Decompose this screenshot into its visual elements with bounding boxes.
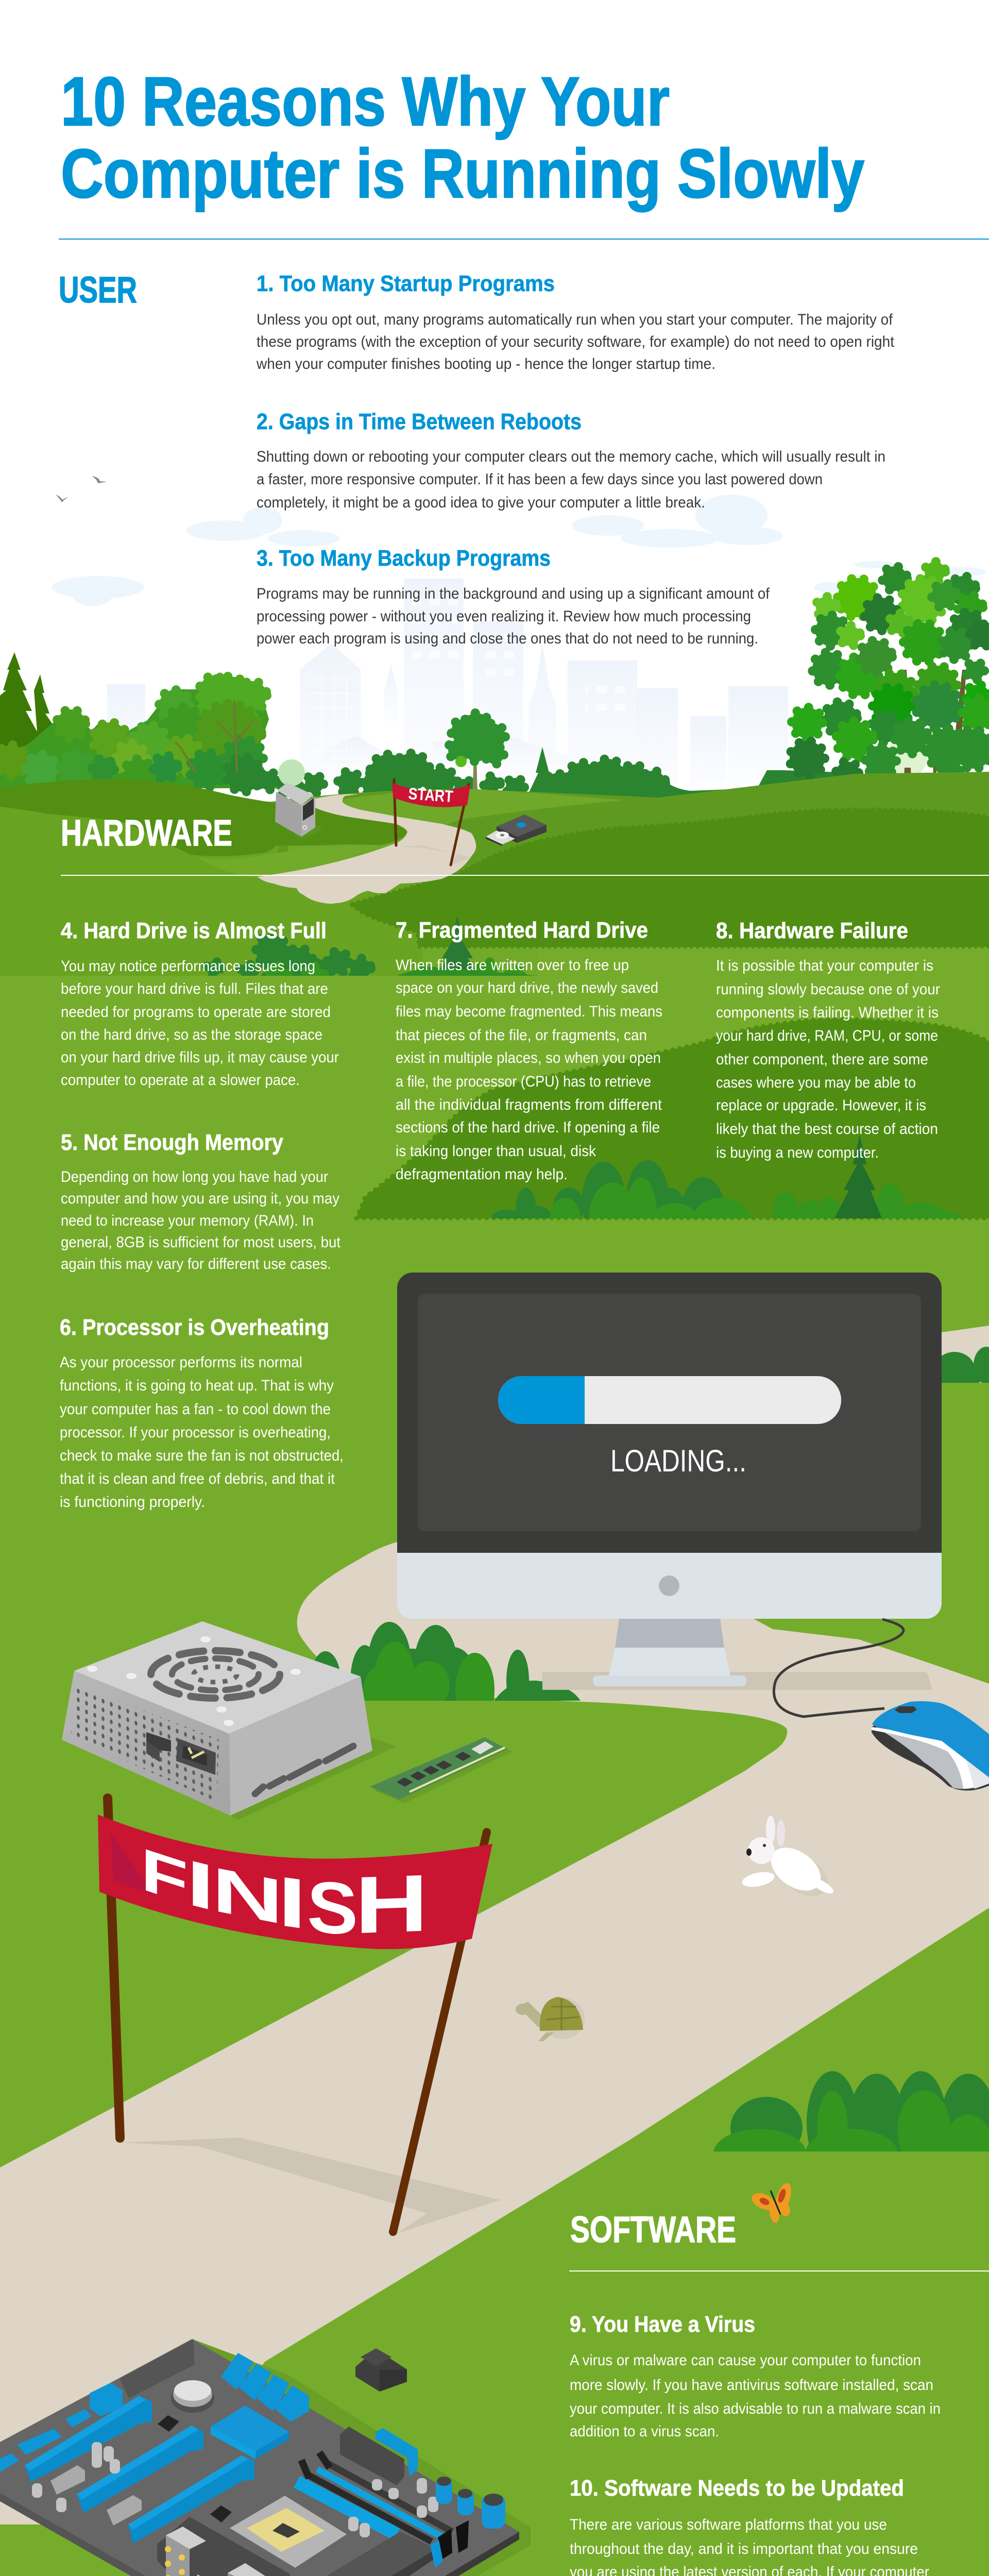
ram clips bbox=[438, 2520, 469, 2560]
mouse with cable bbox=[774, 1619, 989, 1791]
reason 3 bbox=[257, 546, 770, 647]
monitor bezel bbox=[397, 1273, 942, 1553]
reason 7: that pieces of the file, or fragments, can bbox=[396, 1027, 647, 1044]
reason 7 bbox=[396, 918, 662, 1183]
psu screws bbox=[87, 1636, 301, 1726]
mouse cable bbox=[774, 1619, 903, 1717]
hardware rule bbox=[61, 875, 989, 876]
blue block chipset bbox=[211, 2405, 289, 2459]
dark block bbox=[340, 2427, 404, 2485]
reason 2: 2. Gaps in Time Between Reboots bbox=[257, 409, 582, 434]
small conifer near start bbox=[528, 747, 557, 793]
psu fan grille bbox=[151, 1651, 280, 1698]
reason 8: components is failing. Whether it is bbox=[716, 1004, 939, 1021]
reason 6: that it is clean and free of debris, and that it bbox=[60, 1470, 335, 1487]
reason 9: your computer. It is also advisable to run a malware scan in bbox=[570, 2400, 941, 2417]
reason 10: 10. Software Needs to be Updated bbox=[570, 2476, 904, 2501]
reason 6: functions, it is going to heat up. That is why bbox=[60, 1377, 334, 1394]
rabbit bbox=[741, 1816, 835, 1905]
reason 6: processor. If your processor is overheating, bbox=[60, 1424, 331, 1441]
title bbox=[61, 63, 864, 212]
reason 4: 4. Hard Drive is Almost Full bbox=[61, 918, 327, 943]
reason 9: A virus or malware can cause your computer to function bbox=[570, 2352, 921, 2369]
tortoise bbox=[516, 1997, 585, 2041]
reason 2 bbox=[257, 409, 885, 511]
reason 3: power each program is using and close the ones that do not need to be running. bbox=[257, 630, 758, 647]
trunks bbox=[841, 670, 966, 813]
reason 7: space on your hard drive, the newly saved bbox=[396, 979, 658, 996]
conifer bbox=[441, 916, 476, 971]
reason 6: As your processor performs its normal bbox=[60, 1354, 302, 1371]
mid bushes along hardware band bbox=[202, 916, 538, 976]
user section heading: USER bbox=[59, 270, 137, 311]
reason 5: need to increase your memory (RAM). In bbox=[61, 1212, 314, 1229]
reason 6: is functioning properly. bbox=[60, 1494, 205, 1511]
reason 6 bbox=[60, 1315, 344, 1511]
birds bbox=[56, 476, 107, 502]
finish banner bbox=[98, 1798, 492, 2232]
reason 9: addition to a virus scan. bbox=[570, 2423, 719, 2440]
monitor foot shadow bbox=[542, 1672, 932, 1690]
RAM stick bbox=[370, 1737, 513, 1803]
finish letters: H bbox=[355, 1858, 428, 1951]
road section behind monitor bbox=[942, 1326, 989, 1383]
blue capacitors bbox=[436, 2477, 505, 2529]
main heatsink bbox=[300, 2532, 434, 2576]
reason 8: likely that the best course of action bbox=[716, 1121, 938, 1138]
road to the finish bbox=[0, 1542, 989, 2524]
monitor stand bbox=[615, 1619, 724, 1648]
banner poles bbox=[394, 779, 469, 865]
monitor chin bbox=[397, 1553, 942, 1619]
reason 7: files may become fragmented. This means bbox=[396, 1003, 662, 1020]
io blocks bbox=[228, 2563, 309, 2576]
heatsink fins bbox=[221, 2353, 309, 2422]
reason 6: 6. Processor is Overheating bbox=[60, 1315, 329, 1340]
reason 7: defragmentation may help. bbox=[396, 1166, 568, 1183]
tree near start bbox=[448, 713, 505, 795]
reason 4: on your hard drive fills up, it may cause your bbox=[61, 1049, 339, 1066]
reason 4: on the hard drive, so as the storage space bbox=[61, 1026, 322, 1043]
expansion slots bbox=[25, 2396, 254, 2544]
reason 5: again this may vary for different use cases. bbox=[61, 1256, 331, 1273]
clouds bbox=[52, 495, 986, 606]
finish poles bbox=[108, 1798, 120, 2138]
reason 8: is buying a new computer. bbox=[716, 1144, 879, 1161]
mouse body bbox=[872, 1705, 989, 1791]
conifers bbox=[0, 652, 58, 788]
reason 6: check to make sure the fan is not obstructed, bbox=[60, 1447, 344, 1464]
left mid green ground bbox=[0, 802, 538, 976]
start hill bbox=[258, 772, 989, 886]
reason 8: It is possible that your computer is bbox=[716, 957, 933, 974]
reason 1: when your computer finishes booting up - hence the longer startup time. bbox=[256, 355, 715, 372]
reason 1 bbox=[256, 271, 895, 372]
bush by monitor bbox=[311, 1622, 581, 1701]
computer tower bbox=[275, 783, 325, 839]
hill right of road bbox=[773, 1383, 989, 1684]
psu switch bbox=[146, 1732, 171, 1752]
reason 1: 1. Too Many Startup Programs bbox=[257, 271, 555, 296]
reason 8: replace or upgrade. However, it is bbox=[716, 1097, 926, 1114]
top capacitor bbox=[171, 2380, 214, 2413]
reason 7: When files are written over to free up bbox=[396, 957, 629, 974]
reason 7: is taking longer than usual, disk bbox=[396, 1143, 596, 1160]
psu top face bbox=[74, 1621, 361, 1734]
reason 5: general, 8GB is sufficient for most users, but bbox=[61, 1234, 341, 1251]
hardware section heading: HARDWARE bbox=[61, 813, 232, 854]
finish line shadow on road bbox=[120, 2138, 500, 2233]
finish letters: I bbox=[278, 1861, 306, 1944]
finish letters: S bbox=[307, 1866, 358, 1951]
finish letters: N bbox=[212, 1854, 283, 1938]
cpu socket bbox=[230, 2496, 347, 2568]
motherboard bbox=[0, 2339, 531, 2576]
mouse top bbox=[872, 1701, 989, 1777]
reason 8 bbox=[716, 918, 940, 1161]
finish letters: F bbox=[141, 1835, 188, 1917]
bushes on lower dark hill bbox=[492, 1136, 962, 1218]
blue bar bbox=[376, 2428, 418, 2477]
reason 7: exist in multiple places, so when you open bbox=[396, 1049, 661, 1066]
reason 7: 7. Fragmented Hard Drive bbox=[396, 918, 648, 943]
software section heading: SOFTWARE bbox=[570, 2210, 736, 2250]
title: 10 Reasons Why Your bbox=[61, 63, 670, 140]
far hedge line bbox=[277, 753, 855, 804]
psu shadow bbox=[230, 1738, 396, 1820]
start banner shadow bbox=[397, 845, 471, 865]
banner label: START bbox=[408, 784, 454, 806]
reason 7: a file, the processor (CPU) has to retrieve bbox=[396, 1073, 651, 1090]
bushes lower right bbox=[714, 2071, 989, 2151]
reason 7: all the individual fragments from different bbox=[396, 1096, 662, 1113]
reason 5: Depending on how long you have had your bbox=[61, 1168, 328, 1185]
psu left face bbox=[62, 1671, 230, 1816]
reason 10: throughout the day, and it is important that you ensure bbox=[570, 2540, 918, 2557]
reason 8: running slowly because one of your bbox=[716, 981, 940, 998]
power connector bbox=[355, 2348, 407, 2392]
reason 8: cases where you may be able to bbox=[716, 1074, 916, 1091]
io shield backing bbox=[157, 2517, 290, 2576]
left dark knoll bbox=[0, 779, 407, 856]
reason 10: There are various software platforms that you use bbox=[570, 2516, 887, 2533]
optical drive bbox=[486, 815, 547, 846]
reason 2: completely, it might be a good idea to give your computer a little break. bbox=[257, 494, 705, 511]
reason 9: 9. You Have a Virus bbox=[570, 2312, 755, 2337]
reason 3: 3. Too Many Backup Programs bbox=[257, 546, 551, 571]
reason 5: computer and how you are using it, you may bbox=[61, 1190, 339, 1207]
reason 4: computer to operate at a slower pace. bbox=[61, 1072, 300, 1089]
skyline windows bbox=[310, 592, 635, 761]
city skyline bbox=[107, 579, 788, 788]
conifer bbox=[834, 1135, 882, 1218]
reason 10 bbox=[570, 2476, 929, 2576]
lower dark hill bbox=[356, 1019, 989, 1218]
start banner bbox=[392, 779, 470, 865]
reason 7: sections of the hard drive. If opening a file bbox=[396, 1119, 660, 1136]
reason 1: these programs (with the exception of your security software, for example) do not need to open right bbox=[257, 333, 895, 350]
winding path at the start bbox=[258, 794, 476, 904]
left tree cluster bbox=[0, 652, 305, 792]
psu right face bbox=[229, 1676, 372, 1816]
psu vents bbox=[255, 1746, 353, 1794]
reason 4: before your hard drive is full. Files that are bbox=[61, 980, 328, 997]
reason 9 bbox=[570, 2312, 941, 2440]
blue connector and pin headers bbox=[0, 2383, 123, 2472]
loading text: LOADING... bbox=[610, 1444, 746, 1478]
audio ports bbox=[165, 2527, 206, 2576]
monitor bbox=[397, 1273, 942, 1690]
reason 8: other component, there are some bbox=[716, 1051, 928, 1068]
reason 6: your computer has a fan - to cool down the bbox=[60, 1401, 331, 1418]
finish letters: I bbox=[186, 1845, 215, 1925]
monitor screen bbox=[418, 1294, 921, 1531]
silver capacitors bbox=[32, 2442, 438, 2537]
reason 4: needed for programs to operate are stored bbox=[61, 1004, 331, 1021]
hills behind the hardware section bbox=[0, 772, 989, 2576]
reason 1: Unless you opt out, many programs automatically run when you start your computer. The majority of bbox=[257, 311, 893, 328]
title rule bbox=[59, 239, 989, 240]
reason 9: more slowly. If you have antivirus software installed, scan bbox=[570, 2377, 933, 2394]
memory slots bbox=[297, 2452, 452, 2541]
butterfly bbox=[749, 2181, 794, 2224]
board top bbox=[0, 2339, 519, 2576]
title: Computer is Running Slowly bbox=[61, 135, 864, 212]
reason 2: a faster, more responsive computer. If it has been a few days since you last powered down bbox=[257, 471, 823, 488]
reason 4: You may notice performance issues long bbox=[61, 958, 315, 975]
board sides bbox=[0, 2493, 299, 2576]
right dark hill bbox=[349, 809, 989, 947]
finish letters bbox=[141, 1835, 428, 1951]
reason 3: Programs may be running in the background and using up a significant amount of bbox=[257, 585, 770, 602]
reason 5: 5. Not Enough Memory bbox=[61, 1130, 283, 1155]
main green ground bbox=[0, 947, 989, 2576]
rear connectors bbox=[120, 2339, 195, 2398]
reason 5 bbox=[61, 1130, 341, 1273]
black chips bbox=[158, 2415, 232, 2522]
canopy mass bbox=[0, 675, 278, 788]
loading bar bbox=[498, 1376, 841, 1424]
reason 3: processing power - without you even realizing it. Review how much processing bbox=[257, 608, 751, 625]
software rule bbox=[569, 2270, 989, 2272]
reason 2: Shutting down or rebooting your computer clears out the memory cache, which will usually result in bbox=[257, 448, 885, 465]
power supply unit bbox=[62, 1621, 396, 1820]
reason 8: 8. Hardware Failure bbox=[716, 918, 908, 943]
reason 4 bbox=[61, 918, 339, 1089]
right tree cluster bbox=[790, 562, 989, 813]
bushes behind monitor right bbox=[942, 1347, 989, 1383]
small heat sinks bbox=[50, 2465, 142, 2526]
reason 8: your hard drive, RAM, CPU, or some bbox=[716, 1027, 938, 1044]
psu socket bbox=[176, 1738, 216, 1775]
board shadow bbox=[192, 2339, 531, 2576]
lighter ground below knoll bbox=[198, 846, 381, 878]
